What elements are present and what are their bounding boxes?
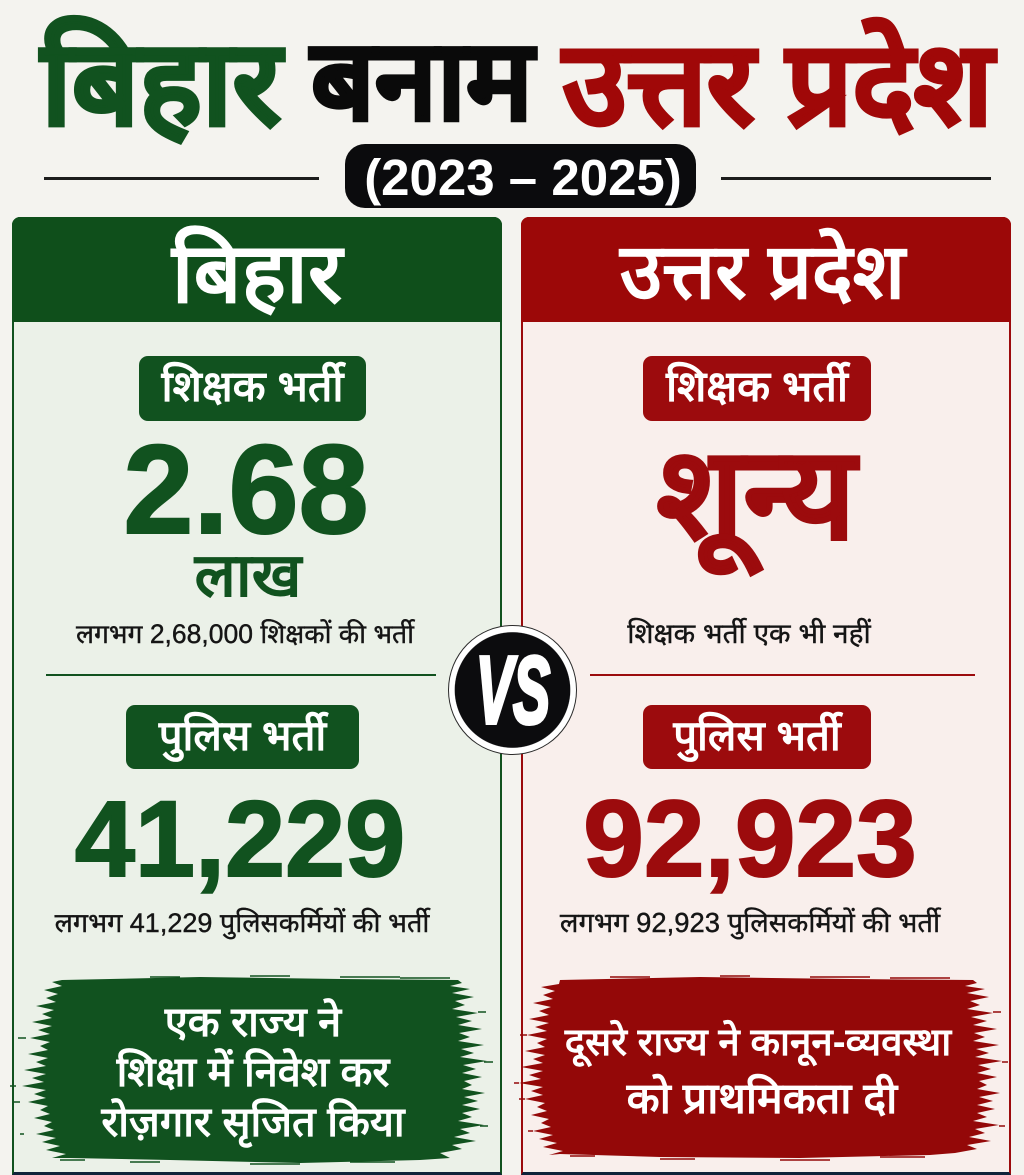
title word: Bihar: बिहार bbox=[41, 18, 281, 150]
panel: Bihar bbox=[12, 217, 502, 1175]
title word: Uttar Pradesh: उत्तर प्रदेश bbox=[563, 19, 993, 149]
conclusion text: रोज़गार सृजित किया bbox=[101, 1098, 405, 1145]
divider line: Uttar Pradesh bbox=[590, 674, 975, 676]
brush banner: UP conclusion bbox=[514, 975, 1008, 1161]
label: police recruitment bbox=[126, 705, 359, 769]
panel heading: Bihar bbox=[12, 217, 502, 322]
panel heading: Uttar Pradesh: उत्तर प्रदेश bbox=[620, 229, 905, 315]
panel heading: Bihar: बिहार bbox=[172, 226, 342, 320]
title bbox=[38, 14, 998, 150]
panel: Uttar Pradesh bbox=[521, 217, 1011, 1175]
stat note: लगभग 92,923 पुलिसकर्मियों की भर्ती bbox=[560, 907, 940, 938]
conclusion text bbox=[564, 1020, 952, 1123]
conclusion text: एक राज्य ने bbox=[165, 998, 341, 1045]
stat note: शिक्षक भर्ती एक भी नहीं bbox=[627, 618, 871, 649]
stat: zero: शून्य bbox=[656, 423, 856, 566]
conclusion text: को प्राथमिकता दी bbox=[627, 1075, 897, 1123]
stat: 92,923: 92,923 bbox=[583, 778, 917, 900]
stat unit: lakh: लाख bbox=[194, 541, 302, 609]
label: police recruitment: पुलिस भर्ती bbox=[159, 712, 326, 759]
VS badge: VS bbox=[476, 637, 550, 744]
conclusion text: शिक्षा में निवेश कर bbox=[117, 1048, 389, 1095]
title word: versus: बनाम bbox=[311, 18, 533, 143]
conclusion text bbox=[100, 998, 406, 1148]
label: teacher recruitment bbox=[643, 356, 871, 421]
label: police recruitment: पुलिस भर्ती bbox=[673, 712, 841, 759]
brush banner: Bihar conclusion bbox=[10, 975, 493, 1165]
label: teacher recruitment bbox=[139, 356, 366, 421]
label: police recruitment bbox=[643, 705, 871, 769]
label: teacher recruitment: शिक्षक भर्ती bbox=[161, 363, 344, 411]
panel heading: Uttar Pradesh bbox=[521, 217, 1011, 322]
label: teacher recruitment: शिक्षक भर्ती bbox=[666, 363, 848, 411]
stat note: लगभग 41,229 पुलिसकर्मियों की भर्ती bbox=[55, 908, 429, 938]
stat: 2.68: 2.68 bbox=[123, 419, 369, 560]
stat: 41,229: 41,229 bbox=[75, 778, 405, 899]
subtitle date range pill: (2023 – 2025) bbox=[364, 149, 682, 206]
divider line: Bihar bbox=[46, 674, 436, 676]
VS badge bbox=[448, 625, 577, 755]
conclusion text: दूसरे राज्य ने कानून-व्यवस्था bbox=[565, 1021, 951, 1064]
stat note: लगभग 2,68,000 शिक्षकों की भर्ती bbox=[76, 619, 414, 649]
